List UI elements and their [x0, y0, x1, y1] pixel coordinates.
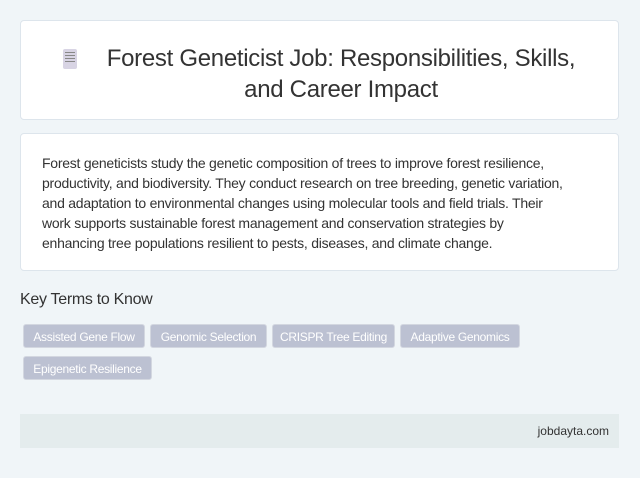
tag	[150, 324, 267, 348]
description text: productivity, and biodiversity. They conduct research on tree breeding, genetic variation,	[42, 175, 563, 191]
footer: jobdayta.com	[538, 424, 609, 438]
tag	[23, 356, 152, 380]
icon: document	[63, 49, 77, 69]
description text: enhancing tree populations resilient to pests, diseases, and climate change.	[42, 235, 492, 251]
title: Forest Geneticist Job: Responsibilities, Skills, and Career Impact	[107, 45, 575, 103]
panel: description	[20, 133, 619, 271]
footer	[20, 414, 619, 448]
panel: title card	[20, 20, 619, 120]
description text: and adaptation to environmental changes using molecular tools and field trials. Their	[42, 195, 543, 211]
tag: Adaptive Genomics	[411, 330, 509, 344]
tag: CRISPR Tree Editing	[280, 330, 387, 344]
heading: key terms: Key Terms to Know	[20, 291, 152, 308]
tag: Genomic Selection	[161, 330, 256, 344]
tag	[23, 324, 145, 348]
description text	[42, 155, 563, 251]
tag: Assisted Gene Flow	[33, 330, 135, 344]
tag	[400, 324, 520, 348]
tag	[272, 324, 395, 348]
description text: Forest geneticists study the genetic composition of trees to improve forest resilience,	[42, 155, 544, 171]
tag: Epigenetic Resilience	[33, 362, 142, 376]
description text: work supports sustainable forest management and conservation strategies by	[42, 215, 504, 231]
